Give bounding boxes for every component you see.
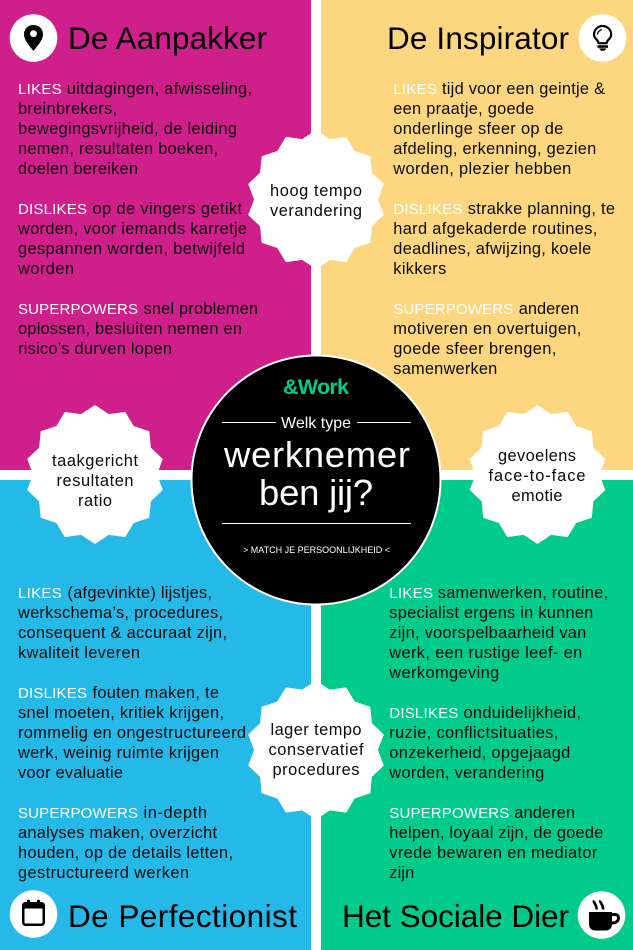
text block: likes, dislikes, superpowers: hard afgekaderde routines, xyxy=(393,220,597,238)
text block: likes, dislikes, superpowers: werkschema’s, procedures, xyxy=(17,604,223,622)
text block: likes, dislikes, superpowers: werkomgeving xyxy=(388,664,499,682)
text block: likes, dislikes, superpowers xyxy=(17,584,246,882)
text block: likes, dislikes, superpowers: DISLIKES xyxy=(18,685,87,702)
text block: likes, dislikes, superpowers: kwaliteit leveren xyxy=(18,644,140,662)
text block: likes, dislikes, superpowers: bewegingsvrijheid, de leiding xyxy=(18,120,237,138)
text block: likes, dislikes, superpowers: onduidelijkheid, xyxy=(464,704,581,722)
text block: likes, dislikes, superpowers: zijn, voorspelbaarheid van xyxy=(389,624,586,642)
text block: likes, dislikes, superpowers: ruzie, conflictsituaties, xyxy=(389,724,558,742)
text block: likes, dislikes, superpowers: worden, verandering xyxy=(388,764,544,782)
text block: likes, dislikes, superpowers: uitdagingen, afwisseling, xyxy=(67,80,252,98)
panel: De Aanpakker xyxy=(0,0,311,470)
text block: likes, dislikes, superpowers: goede sfeer brengen, xyxy=(393,340,556,358)
panel: De Perfectionist xyxy=(0,480,311,950)
text block: likes, dislikes, superpowers: houden, op de details letten, xyxy=(18,844,233,862)
badge: hoog tempo verandering: verandering xyxy=(270,202,362,220)
logo: &Work: &Work xyxy=(283,375,349,399)
panel: Het Sociale Dier xyxy=(321,480,633,950)
badge: gevoelens face-to-face emotie: face-to-face xyxy=(488,467,586,485)
text block: likes, dislikes, superpowers: samenwerken xyxy=(393,360,497,378)
badge: hoog tempo verandering xyxy=(248,130,384,269)
heading: De Inspirator: De Inspirator xyxy=(387,20,569,56)
badge: lager tempo conservatief procedures: conservatief xyxy=(268,741,364,759)
text block: likes, dislikes, superpowers: worden, voor iemands karretje xyxy=(17,220,247,238)
text block: likes, dislikes, superpowers: LIKES xyxy=(18,81,62,98)
text block: likes, dislikes, superpowers: onzekerheid, opgejaagd xyxy=(389,744,570,762)
text block: likes, dislikes, superpowers: oplossen, besluiten nemen en xyxy=(18,320,242,338)
text block: likes, dislikes, superpowers: worden xyxy=(17,260,74,278)
text block: likes, dislikes, superpowers: gestructureerd werken xyxy=(18,864,189,882)
badge: gevoelens face-to-face emotie: emotie xyxy=(512,487,562,505)
text block: likes, dislikes, superpowers: voor evaluatie xyxy=(18,764,123,782)
central circle: title xyxy=(192,356,440,604)
text block: likes, dislikes, superpowers: DISLIKES xyxy=(393,201,462,218)
text block: likes, dislikes, superpowers: fouten maken, te xyxy=(92,684,219,702)
text block: likes, dislikes, superpowers: anderen xyxy=(514,804,575,822)
text block: likes, dislikes, superpowers: consequent & accuraat zijn, xyxy=(18,624,227,642)
text block: likes, dislikes, superpowers: in-depth xyxy=(144,804,207,822)
text block: likes, dislikes, superpowers: een praatje, goede xyxy=(393,100,534,118)
text block: likes, dislikes, superpowers: rommelig en ongestructureerd xyxy=(18,724,246,742)
text block: likes, dislikes, superpowers: afdeling, erkenning, gezien xyxy=(393,140,596,158)
text block: likes, dislikes, superpowers: LIKES xyxy=(393,81,437,98)
text block: likes, dislikes, superpowers: kikkers xyxy=(393,260,446,278)
text block: likes, dislikes, superpowers: risico’s durven lopen xyxy=(18,340,172,358)
badge: hoog tempo verandering: hoog tempo xyxy=(270,182,362,200)
text block: likes, dislikes, superpowers: deadlines, afwijzing, koele xyxy=(393,240,591,258)
text block: likes, dislikes, superpowers: DISLIKES xyxy=(18,201,87,218)
icon: coffee cup xyxy=(578,891,625,939)
badge: lager tempo conservatief procedures: procedures xyxy=(272,761,360,779)
heading: Het Sociale Dier: Het Sociale Dier xyxy=(342,898,569,934)
text block: likes, dislikes, superpowers: zijn xyxy=(389,864,414,882)
text block: likes, dislikes, superpowers xyxy=(388,584,608,882)
badge: taakgericht resultaten ratio: resultaten xyxy=(56,472,134,490)
tagline: > MATCH JE PERSOONLIJKHEID < xyxy=(243,545,390,555)
text block: likes, dislikes, superpowers: samenwerken, routine, xyxy=(438,584,608,602)
title: werknemer ben jij?: werknemer xyxy=(223,434,410,475)
heading: De Aanpakker: De Aanpakker xyxy=(68,20,267,56)
text block: likes, dislikes, superpowers: snel problemen xyxy=(144,300,258,318)
badge: taakgericht resultaten ratio: ratio xyxy=(78,492,112,510)
text block: likes, dislikes, superpowers: LIKES xyxy=(389,585,433,602)
text block: likes, dislikes, superpowers xyxy=(392,80,615,378)
badge: taakgericht resultaten ratio: taakgericht xyxy=(52,452,138,470)
badge: gevoelens face-to-face emotie xyxy=(470,405,605,544)
badge: taakgericht resultaten ratio xyxy=(27,405,163,544)
text block: likes, dislikes, superpowers: SUPERPOWERS xyxy=(18,805,138,822)
text block: likes, dislikes, superpowers: anderen xyxy=(519,300,579,318)
text block: likes, dislikes, superpowers: motiveren en overtuigen, xyxy=(393,320,581,338)
text block: likes, dislikes, superpowers: tijd voor een geintje & xyxy=(442,80,605,98)
badge: lager tempo conservatief procedures: lager tempo xyxy=(270,721,362,739)
title: werknemer ben jij?: ben jij? xyxy=(259,472,373,513)
text block: likes, dislikes, superpowers: (afgevinkte) lijstjes, xyxy=(68,584,212,602)
subtitle: Welk type: Welk type xyxy=(281,415,351,432)
icon: light bulb xyxy=(579,14,626,62)
text block: likes, dislikes, superpowers: vrede bewaren en mediator xyxy=(389,844,598,862)
text block: likes, dislikes, superpowers: doelen bereiken xyxy=(18,160,138,178)
text block: likes, dislikes, superpowers: analyses maken, overzicht xyxy=(18,824,217,842)
icon: calendar xyxy=(10,890,57,938)
text block: likes, dislikes, superpowers: breinbrekers, xyxy=(18,100,117,118)
text block: likes, dislikes, superpowers: SUPERPOWERS xyxy=(389,805,509,822)
title: werknemer ben jij? xyxy=(223,434,410,513)
text block: likes, dislikes, superpowers: worden, plezier hebben xyxy=(392,160,571,178)
text block: likes, dislikes, superpowers: op de vingers getikt xyxy=(92,200,242,218)
panel: De Inspirator xyxy=(321,0,633,470)
text block: likes, dislikes, superpowers: DISLIKES xyxy=(389,705,458,722)
text block: likes, dislikes, superpowers: SUPERPOWERS xyxy=(393,301,513,318)
heading: De Perfectionist: De Perfectionist xyxy=(68,898,297,934)
text block: likes, dislikes, superpowers: snel moeten, kritiek krijgen, xyxy=(18,704,224,722)
text block: likes, dislikes, superpowers: werk, weinig ruimte krijgen xyxy=(17,744,219,762)
badge: gevoelens face-to-face emotie: gevoelens xyxy=(498,447,576,465)
text block: likes, dislikes, superpowers: helpen, loyaal zijn, de goede xyxy=(389,824,603,842)
text block: likes, dislikes, superpowers: onderlinge sfeer op de xyxy=(393,120,563,138)
badge: lager tempo conservatief procedures xyxy=(248,680,384,820)
text block: likes, dislikes, superpowers: strakke planning, te xyxy=(468,200,615,218)
icon: map pin xyxy=(10,14,57,62)
text block: likes, dislikes, superpowers xyxy=(17,80,258,358)
text block: likes, dislikes, superpowers: gespannen worden, betwijfeld xyxy=(18,240,245,258)
text block: likes, dislikes, superpowers: werk, een rustige leef- en xyxy=(388,644,582,662)
text block: likes, dislikes, superpowers: SUPERPOWERS xyxy=(18,301,138,318)
text block: likes, dislikes, superpowers: specialist ergens in kunnen xyxy=(389,604,593,622)
text block: likes, dislikes, superpowers: nemen, resultaten boeken, xyxy=(18,140,218,158)
text block: likes, dislikes, superpowers: LIKES xyxy=(18,585,62,602)
